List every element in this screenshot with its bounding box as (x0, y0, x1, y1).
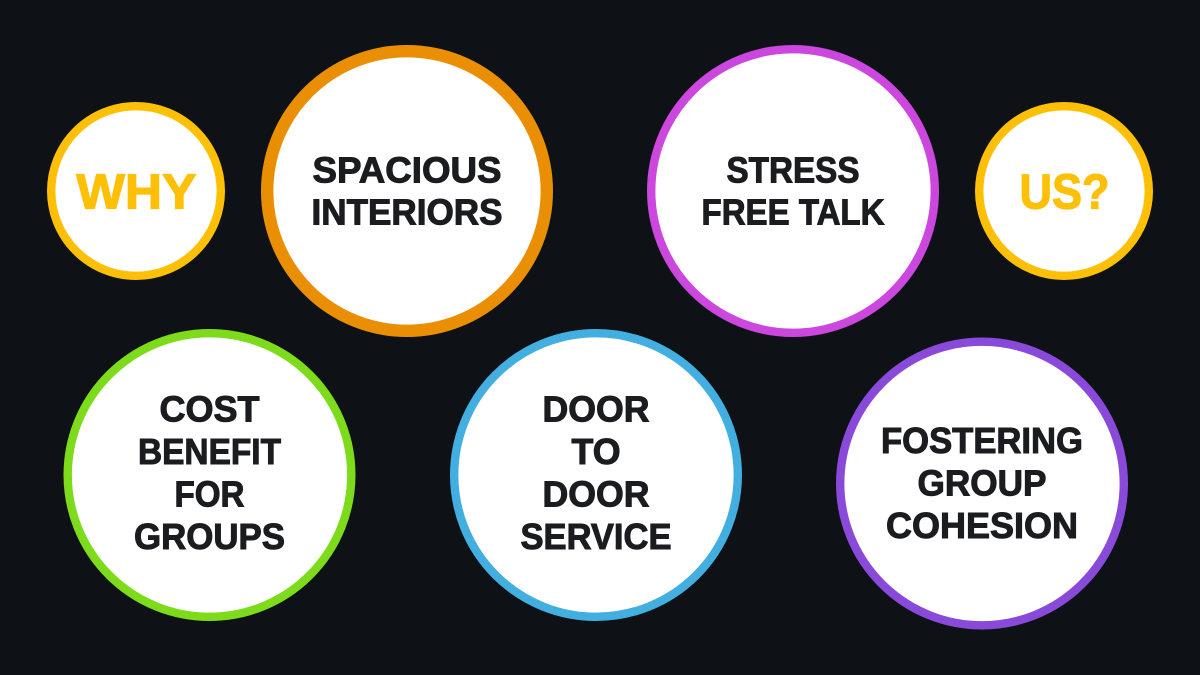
circle: Cost Benefit for Groups: GROUPS (134, 516, 285, 557)
circle: Door to Door Service (454, 333, 738, 617)
circle: Door to Door Service: SERVICE (520, 516, 672, 557)
circle: US?: US? (1020, 165, 1110, 219)
circle: Stress Free Talk: FREE TALK (702, 192, 884, 232)
circle: Stress Free Talk (651, 49, 935, 333)
circle: Cost Benefit for Groups: BENEFIT (138, 431, 281, 472)
circle: Stress Free Talk: STRESS (726, 149, 860, 190)
circle: Spacious Interiors: SPACIOUS (312, 149, 502, 190)
circle: Cost Benefit for Groups: FOR (174, 474, 244, 514)
circle: Fostering Group Cohesion (840, 342, 1124, 625)
circle: Fostering Group Cohesion: GROUP (918, 462, 1046, 504)
circle: Fostering Group Cohesion: COHESION (886, 505, 1078, 546)
circle: Cost Benefit for Groups (68, 333, 351, 617)
circle: Spacious Interiors (267, 51, 547, 331)
circle: Door to Door Service: DOOR (542, 388, 650, 430)
circle: Spacious Interiors: INTERIORS (312, 192, 502, 232)
circle: Cost Benefit for Groups: COST (160, 388, 260, 430)
circle: Door to Door Service: DOOR (542, 474, 650, 514)
circle: US? (979, 106, 1149, 276)
circle: WHY (51, 106, 221, 276)
circle: WHY: WHY (76, 165, 196, 219)
circle: Door to Door Service: TO (572, 431, 620, 472)
circle: Fostering Group Cohesion: FOSTERING (881, 420, 1083, 461)
